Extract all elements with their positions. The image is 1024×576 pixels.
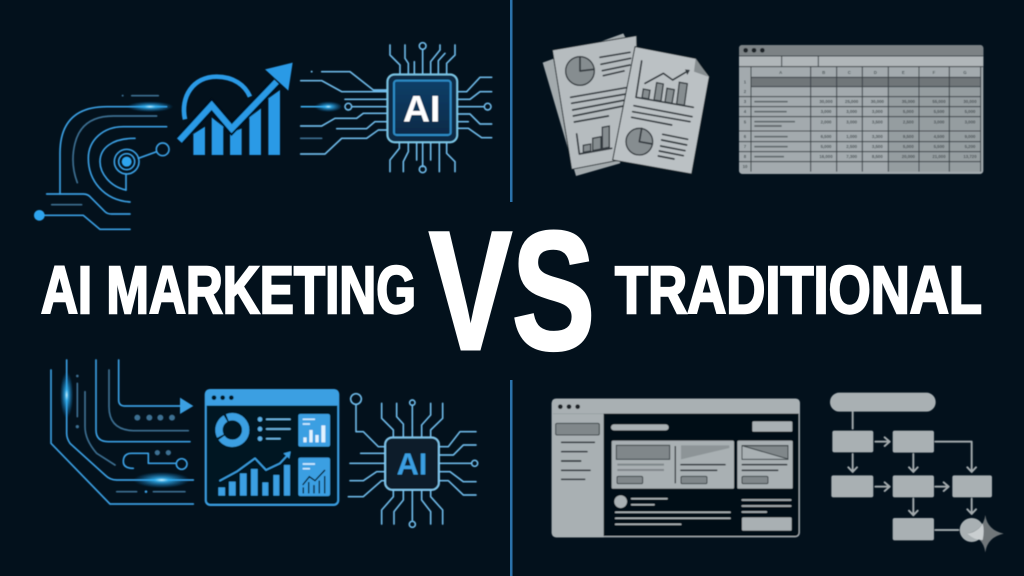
icon: spreadsheet window: B bbox=[822, 70, 825, 75]
icon: spreadsheet window: 3,000 bbox=[846, 120, 858, 125]
title: VS: VS bbox=[429, 196, 595, 385]
icon: spreadsheet window: 1 bbox=[744, 79, 747, 84]
icon: spreadsheet window: 8,500 bbox=[872, 154, 883, 159]
icon: spreadsheet window: 6 bbox=[744, 134, 747, 139]
icon: spreadsheet window: 2,000 bbox=[821, 120, 832, 125]
icon: spreadsheet window: 3,300 bbox=[872, 134, 883, 139]
icon: spreadsheet window bbox=[739, 45, 983, 174]
icon: spreadsheet window: 8 bbox=[744, 154, 747, 159]
icon: spreadsheet window: 4 bbox=[744, 109, 747, 114]
icon: spreadsheet window: 30,000 bbox=[963, 99, 977, 104]
icon: spreadsheet window: 5,000 bbox=[903, 144, 914, 149]
icon: spreadsheet window: 3,000 bbox=[965, 120, 976, 125]
panel: AI marketing top illustration bbox=[34, 43, 492, 229]
icon: spreadsheet window: 5,500 bbox=[934, 109, 945, 114]
icon: spreadsheet window: 10 bbox=[743, 164, 748, 169]
icon: circuit lines with arrow bbox=[51, 360, 193, 504]
icon: outlined AI chip: AI bbox=[397, 448, 427, 482]
icon: spreadsheet window: F bbox=[933, 70, 936, 75]
panel: traditional top illustration bbox=[543, 33, 983, 176]
icon: spreadsheet window: A bbox=[779, 70, 783, 75]
title: AI Marketing: AI MARKETING bbox=[41, 253, 416, 328]
icon: spreadsheet window: 3,500 bbox=[872, 120, 883, 125]
icon: spreadsheet window: 7,300 bbox=[846, 154, 858, 159]
icon: spreadsheet window: D bbox=[874, 70, 877, 75]
icon: spreadsheet window: 5 bbox=[744, 120, 747, 125]
icon: spreadsheet window: 1,000 bbox=[846, 134, 858, 139]
icon: radar signal circuit bbox=[34, 95, 173, 229]
icon: spreadsheet window: 25,000 bbox=[845, 99, 859, 104]
icon: spreadsheet window: 2,500 bbox=[846, 144, 858, 149]
panel: traditional bottom illustration bbox=[552, 393, 1004, 552]
icon: spreadsheet window: 3,000 bbox=[821, 109, 832, 114]
icon: spreadsheet window: G bbox=[963, 70, 967, 75]
icon: spreadsheet window: 2,500 bbox=[903, 120, 914, 125]
icon: spreadsheet window: 3 bbox=[744, 99, 747, 104]
icon: spreadsheet window: 55,000 bbox=[932, 99, 946, 104]
icon: spreadsheet window: 5,000 bbox=[903, 109, 914, 114]
icon: outlined AI chip bbox=[348, 394, 478, 527]
icon: spreadsheet window: 30,000 bbox=[871, 99, 885, 104]
icon: spreadsheet window: 13,720 bbox=[963, 154, 977, 159]
icon: spreadsheet window: 3,000 bbox=[846, 109, 858, 114]
panel: AI marketing bottom illustration bbox=[51, 360, 478, 527]
icon: circuit traces into chip bbox=[301, 71, 387, 154]
icon: spreadsheet window: 30,000 bbox=[819, 99, 833, 104]
icon: paper reports bbox=[543, 33, 709, 176]
icon: spreadsheet window: 16,000 bbox=[819, 154, 833, 159]
icon: spreadsheet window: 35,000 bbox=[902, 99, 916, 104]
icon: spreadsheet window: 6,500 bbox=[821, 134, 832, 139]
icon: spreadsheet window: 4,500 bbox=[934, 134, 945, 139]
icon: spreadsheet window: 3,500 bbox=[872, 144, 883, 149]
icon: AI chip bbox=[387, 43, 492, 173]
icon: spreadsheet window: C bbox=[848, 70, 851, 75]
icon: growth chart with arrow bbox=[179, 63, 293, 155]
icon: spreadsheet window: 9,500 bbox=[903, 134, 914, 139]
icon: process flowchart bbox=[830, 393, 1004, 552]
icon: spreadsheet window: 3,000 bbox=[872, 109, 883, 114]
icon: spreadsheet window: 5,000 bbox=[821, 144, 832, 149]
icon: spreadsheet window: 5,000 bbox=[965, 109, 976, 114]
icon: analytics dashboard bbox=[205, 389, 339, 505]
icon: spreadsheet window: 5,200 bbox=[965, 144, 976, 149]
icon: spreadsheet window: 3,000 bbox=[934, 120, 945, 125]
icon: spreadsheet window: 20,000 bbox=[902, 154, 916, 159]
icon: AI chip: AI bbox=[403, 88, 440, 130]
icon: spreadsheet window: 2 bbox=[744, 89, 747, 94]
icon: spreadsheet window: 9,000 bbox=[965, 134, 976, 139]
icon: spreadsheet window: E bbox=[902, 70, 905, 75]
icon: spreadsheet window: 7 bbox=[744, 144, 747, 149]
icon: website wireframe window bbox=[552, 399, 800, 537]
icon: spreadsheet window: 5,500 bbox=[934, 144, 945, 149]
icon: spreadsheet window: 21,000 bbox=[932, 154, 946, 159]
